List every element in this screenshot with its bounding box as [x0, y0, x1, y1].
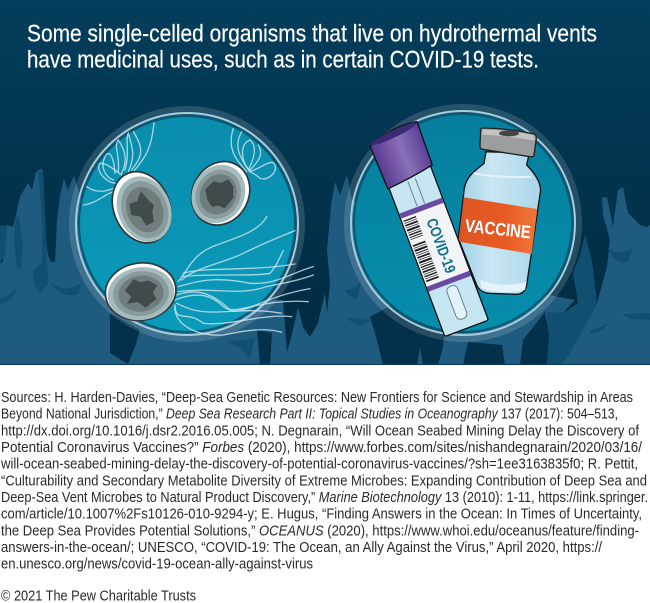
organisms: [83, 123, 313, 335]
sources text block: Beyond National Jurisdiction,” Deep Sea Research Part II: Topical Studies in Oceanography 137 (2017): 504–513,: [1, 407, 618, 423]
icon: vaccine vial: [458, 128, 541, 294]
sources text block: en.unesco.org/news/covid-19-ocean-ally-against-virus: [1, 557, 313, 573]
sources text block: [0, 390, 648, 573]
vent silhouettes: light rock: [0, 168, 650, 365]
barcode: [403, 216, 439, 282]
vent silhouettes: mid-tone rock: [0, 170, 650, 365]
panel: test tube and vaccine circle: [344, 104, 582, 342]
cell 2: [181, 151, 261, 235]
circle ring: [344, 104, 582, 342]
icon: COVID-19 test tube: COVID-19: [422, 216, 459, 276]
cell 1: [102, 163, 181, 252]
icon: vaccine vial: VACCINE: [464, 216, 532, 242]
panel: single-celled organisms circle: [69, 106, 313, 342]
title: [27, 20, 597, 74]
cell 3: [102, 258, 180, 325]
title: have medicinal uses, such as in certain COVID-19 tests.: [27, 46, 539, 74]
vent silhouettes: dark stalactites: [110, 300, 549, 365]
panel: deep-sea background: [0, 0, 650, 365]
circle ring: [69, 106, 305, 342]
flagella: [83, 123, 313, 335]
bottom edge line: [0, 364, 650, 365]
icon: COVID-19 test tube: [367, 119, 491, 338]
